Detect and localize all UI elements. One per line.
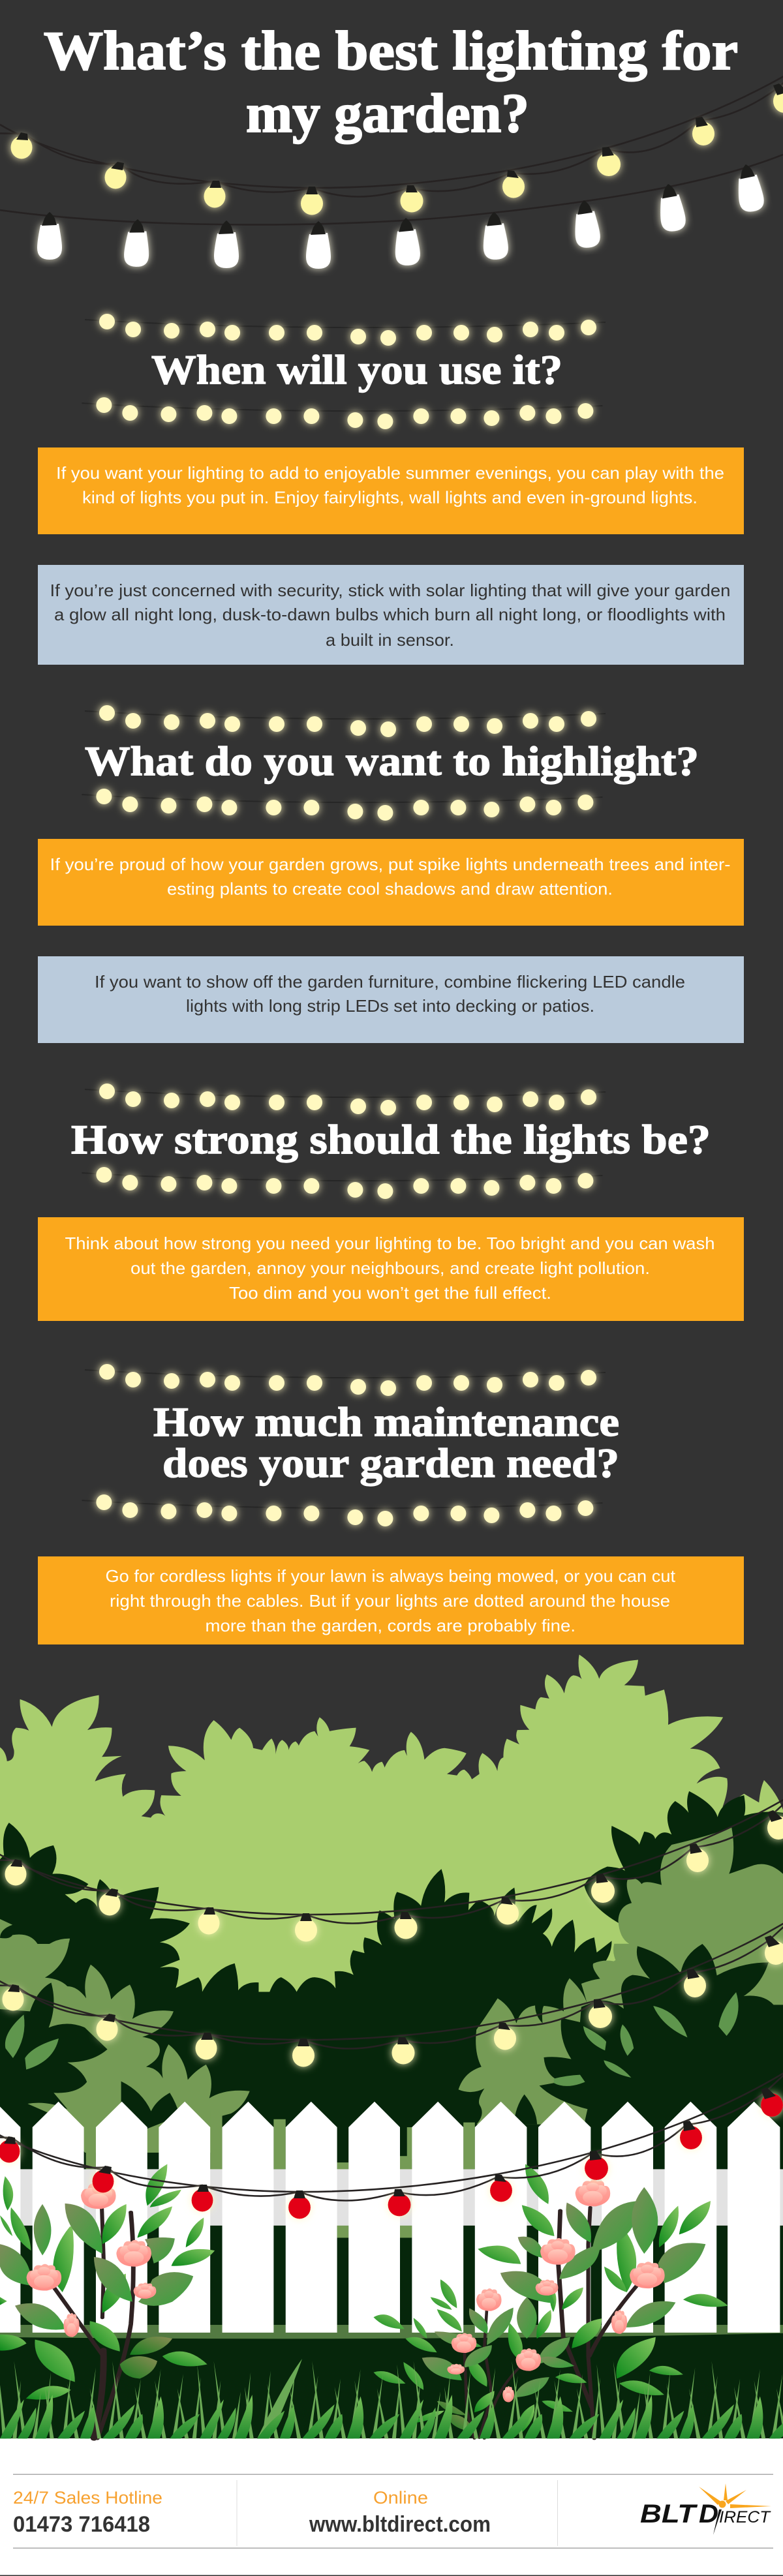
fairy lights below heading xyxy=(82,789,602,821)
blue panel: security xyxy=(38,565,744,665)
white fence pickets xyxy=(0,2102,780,2333)
mid green bush, centre xyxy=(459,1944,783,2125)
white bottom band xyxy=(0,2438,783,2576)
orange panel: spike lights xyxy=(38,839,744,926)
orange panel: summer evenings: If you want your lighting to add to enjoyable summer evenings, you can play with the xyxy=(56,463,724,483)
section 2: what do you want to highlight xyxy=(38,705,744,1043)
fence rail xyxy=(0,2169,783,2226)
orange panel: cordless: more than the garden, cords are probably fine. xyxy=(205,1616,576,1635)
BLT Direct logo xyxy=(640,2483,771,2535)
heading: When will you use it?: When will you use it? xyxy=(151,346,562,393)
leaves xyxy=(0,2164,728,2434)
mid green bush, far left xyxy=(0,1919,70,1952)
heading: What do you want to highlight?: What do you want to highlight? xyxy=(85,738,699,784)
garden bushes, upper layers xyxy=(0,1655,783,2100)
fairy lights below heading xyxy=(82,1494,602,1526)
orange panel: brightness: Think about how strong you need your lighting to be. Too bright and you can wash xyxy=(65,1234,715,1253)
dark leaves over left bush xyxy=(0,1982,108,2153)
red garden string lights xyxy=(0,2069,783,2219)
sales hotline: 01473 716418 xyxy=(13,2512,150,2537)
fairy lights above heading xyxy=(85,1364,606,1396)
title: my garden? xyxy=(246,83,529,144)
rose flowers xyxy=(27,2180,665,2402)
title xyxy=(44,20,738,144)
dark green bush xyxy=(0,1823,783,2100)
blue panel: garden furniture: lights with long strip LEDs set into decking or patios. xyxy=(186,996,594,1016)
sales hotline xyxy=(13,2488,162,2537)
lower garden background xyxy=(0,2074,783,2438)
blue panel: security: a glow all night long, dusk-to-dawn bulbs which burn all night long, or floodlights with xyxy=(54,605,726,624)
heading: How much maintenance does your garden need? xyxy=(153,1399,619,1486)
lighter leaves, left xyxy=(5,2014,59,2070)
sales hotline: 24/7 Sales Hotline xyxy=(13,2488,162,2508)
bushes behind fence xyxy=(86,2110,475,2237)
online address: Online xyxy=(373,2488,428,2508)
BLT Direct logo: D xyxy=(699,2500,718,2528)
yellow garden string lights, lower xyxy=(0,1917,783,2067)
garden bushes, lower left xyxy=(0,1944,250,2153)
white string lights in header xyxy=(0,155,783,269)
orange panel: cordless: Go for cordless lights if your lawn is always being mowed, or you can cut xyxy=(106,1566,676,1586)
fairy lights below heading xyxy=(82,1167,602,1199)
yellow garden string lights, upper xyxy=(0,1792,783,1941)
orange panel: spike lights: esting plants to create cool shadows and draw attention. xyxy=(167,879,613,899)
footer rules xyxy=(0,2474,783,2576)
light green bush xyxy=(0,1655,783,2022)
garden bushes, lower right xyxy=(459,1944,783,2153)
green base board xyxy=(0,2325,783,2339)
fairy lights above heading xyxy=(85,1083,606,1115)
section 1: when will you use it xyxy=(38,314,744,665)
section 3: how strong xyxy=(38,1083,744,1321)
orange panel: brightness: Too dim and you won’t get the full effect. xyxy=(229,1283,551,1303)
mid green bush, left xyxy=(0,1944,250,2153)
heading: How strong should the lights be?: How strong should the lights be? xyxy=(71,1116,711,1162)
fairy lights above heading xyxy=(85,705,606,737)
online address: www.bltdirect.com xyxy=(309,2512,491,2537)
heading: How much maintenance does your garden need?: does your garden need? xyxy=(162,1440,619,1486)
dark leaf lower centre xyxy=(514,2095,537,2125)
blue panel: security: If you’re just concerned with security, stick with solar lighting that will give your garden xyxy=(50,581,731,600)
blue panel: garden furniture: If you want to show off the garden furniture, combine flickering LED candle xyxy=(95,972,685,992)
section 4: maintenance xyxy=(38,1364,744,1644)
mid green bush, right xyxy=(613,1827,783,1963)
online address xyxy=(309,2488,491,2537)
plant stems xyxy=(54,2207,637,2438)
yellow string lights in header xyxy=(0,65,783,215)
orange panel: cordless: right through the cables. But if your lights are dotted around the house xyxy=(110,1591,670,1611)
dark green bush, right xyxy=(584,1791,783,1964)
grass xyxy=(0,2359,783,2438)
title: What’s the best lighting for xyxy=(44,20,738,82)
orange panel: brightness: out the garden, annoy your neighbours, and create light pollution. xyxy=(130,1258,650,1278)
orange panel: brightness xyxy=(38,1217,744,1321)
orange panel: spike lights: If you’re proud of how your garden grows, put spike lights underneath trees and inter- xyxy=(50,855,731,874)
orange panel: summer evenings xyxy=(38,447,744,534)
blue panel: security: a built in sensor. xyxy=(326,630,454,650)
fairy lights above heading xyxy=(85,314,606,346)
fence and plants xyxy=(0,2102,783,2438)
BLT Direct logo: BLT xyxy=(640,2500,698,2528)
dark leaves, right xyxy=(540,1944,783,2153)
orange panel: cordless xyxy=(38,1556,744,1644)
blue panel: garden furniture xyxy=(38,956,744,1043)
fairy lights below heading xyxy=(82,397,602,429)
heading: How much maintenance does your garden need?: How much maintenance xyxy=(153,1399,619,1445)
lighter leaves, right xyxy=(554,1992,739,2086)
orange panel: summer evenings: kind of lights you put in. Enjoy fairylights, wall lights and even in-ground lights. xyxy=(82,488,698,508)
BLT Direct logo: IRECT xyxy=(719,2508,771,2526)
footer xyxy=(0,2474,783,2576)
